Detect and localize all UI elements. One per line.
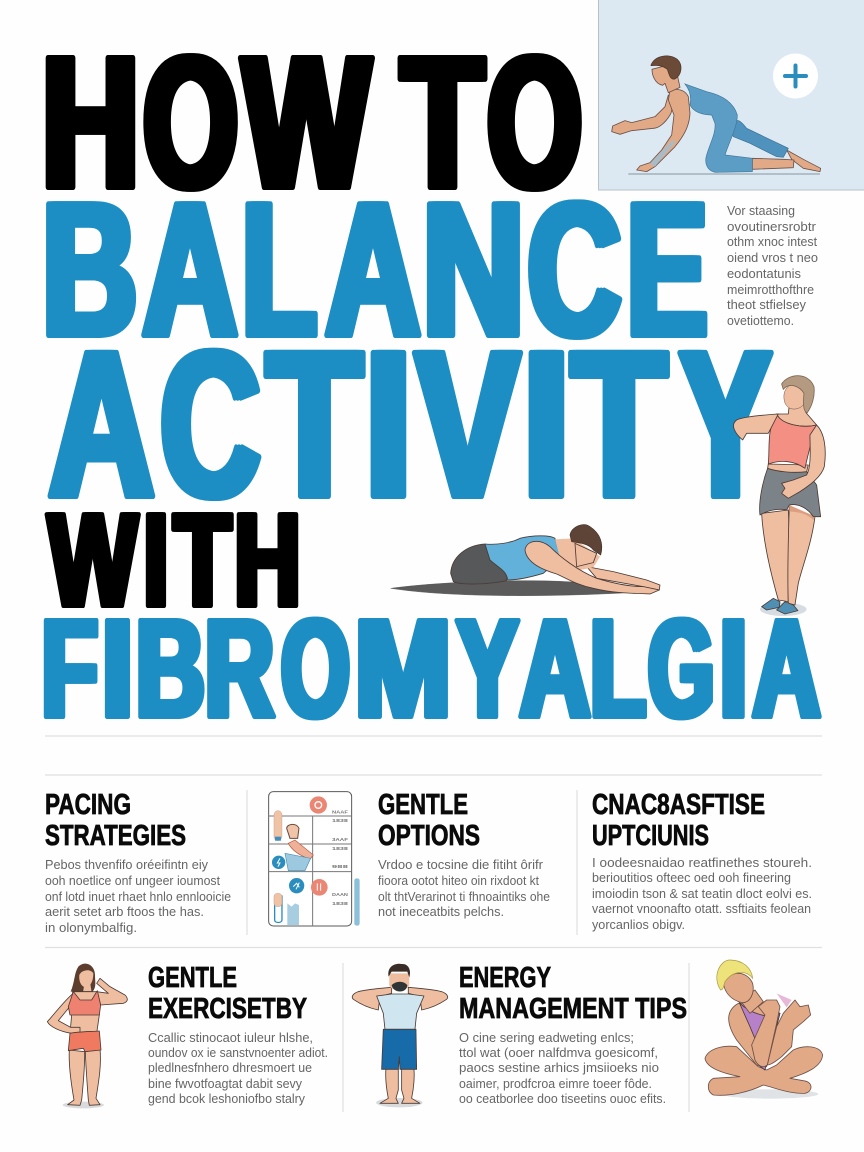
panel: gentle options: [378, 789, 550, 919]
heading: third column: [592, 789, 765, 852]
heading: pacing strategies: PACING: [45, 789, 131, 821]
intro text block: ovetiottemo.: [727, 314, 794, 328]
body text: gentle options: not ineceatbits pelchs.: [378, 905, 504, 919]
title: H: [234, 486, 301, 634]
title: T: [267, 309, 362, 541]
heading: gentle exercise: EXERCISETBY: [148, 993, 307, 1025]
body text: energy management tips: oo ceatborlee doo tiseetins ouoc efits.: [459, 1092, 666, 1106]
body text: third column: vaernot vnoonafto otatt. ssftiaits feolean: [592, 902, 811, 916]
panel: gentle exercise: [148, 962, 328, 1106]
body text: energy management tips: paocs sestine arhics jmsiioeks nio: [459, 1061, 659, 1075]
body text: third column: I oodeesnaidao reatfinethes stoureh.: [592, 856, 812, 870]
illustration: resting child pose: [391, 525, 660, 596]
icon: activity planner chart: [269, 792, 360, 926]
panel: kneeling stretch illustration: [598, 0, 864, 190]
body text: gentle exercise: oundov ox ie sanstvnoenter adiot.: [148, 1046, 328, 1060]
body text: gentle options: Vrdoo e tocsine die fitiht ôrifr: [378, 858, 543, 872]
heading: gentle options: GENTLE: [378, 789, 468, 821]
heading: energy management tips: ENERGY: [459, 962, 551, 994]
title: I: [523, 309, 570, 541]
intro text block: meimrotthofthre: [727, 283, 814, 297]
heading: pacing strategies: STRATEGIES: [45, 820, 186, 852]
heading: gentle options: [378, 789, 480, 852]
title: O: [143, 17, 238, 227]
icon: activity planner chart: 3AAF: [332, 837, 348, 842]
title: A: [143, 164, 237, 376]
heading: third column: UPTCIUNIS: [592, 820, 709, 852]
intro text block: oiend vros t neo: [727, 251, 818, 265]
title: F: [42, 590, 98, 746]
title: W: [48, 486, 137, 634]
title: G: [648, 590, 714, 746]
icon: activity planner chart: NAAF: [332, 810, 348, 815]
illustration: standing woman: [734, 376, 825, 616]
title: A: [520, 590, 590, 746]
title: M: [355, 590, 451, 746]
body text: gentle exercise: pledlnesfnhero dhresmoert ue: [148, 1061, 312, 1075]
title: R: [205, 590, 274, 746]
body text: gentle exercise: [148, 1031, 328, 1106]
heading: pacing strategies: [45, 789, 186, 852]
body text: third column: yorcanlios obigv.: [592, 918, 685, 932]
heading: gentle options: OPTIONS: [378, 820, 480, 852]
title: I: [365, 309, 412, 541]
icon: activity planner chart: 1838: [332, 901, 349, 906]
title: T: [174, 486, 231, 634]
heading: third column: CNAC8ASFTISE: [592, 789, 765, 821]
body text: energy management tips: ttol wat (ooer nalfdmva goesicomf,: [459, 1046, 658, 1060]
body text: gentle exercise: Ccallic stinocaot iuleur hlshe,: [148, 1031, 313, 1045]
title: H: [42, 17, 139, 227]
body text: pacing strategies: aerit setet arb ftoos the has.: [45, 905, 204, 919]
intro text block: Vor staasing: [727, 204, 795, 218]
intro text block: othm xnoc intest: [727, 235, 818, 249]
body text: third column: berioutitios ofteec oed ooh fineering: [592, 871, 791, 885]
title: L: [242, 164, 317, 376]
heading: energy management tips: [459, 962, 687, 1025]
body text: pacing strategies: in olonymbalfig.: [45, 921, 137, 935]
panel: pacing strategies: [45, 789, 231, 935]
title: A: [326, 164, 420, 376]
body text: pacing strategies: Pebos thvenfifo oréeifintn eiy: [45, 858, 209, 872]
body text: gentle exercise: gend bcok leshoniofbo stalry: [148, 1092, 306, 1106]
body text: energy management tips: oaimer, prodfcroa eimre toeer fôde.: [459, 1077, 652, 1091]
panel: energy management tips: [459, 962, 687, 1106]
title: [42, 17, 820, 746]
body text: energy management tips: O cine sering eadweting enlcs;: [459, 1031, 634, 1045]
icon: plus badge: [773, 54, 818, 98]
title: A: [753, 590, 820, 746]
title: Y: [680, 309, 771, 541]
body text: gentle options: fioora ootot hiteo oin rixdoot kt: [378, 874, 540, 888]
icon: activity planner chart: 1838: [332, 846, 349, 851]
illustration: woman in sports top: [47, 964, 127, 1108]
title: N: [423, 164, 524, 376]
body text: gentle options: [378, 858, 550, 919]
title: V: [416, 309, 519, 541]
body text: energy management tips: [459, 1031, 666, 1106]
intro text block: [727, 204, 818, 328]
divider rules: [45, 736, 822, 1112]
icon: activity planner chart: 1838: [332, 818, 349, 823]
icon: activity planner chart: DAAN: [332, 892, 348, 897]
title: I: [102, 590, 133, 746]
body text: third column: [592, 856, 812, 932]
body text: gentle exercise: bine fwvotfoagtat dabit sevy: [148, 1077, 303, 1091]
body text: pacing strategies: ooh noetlice onf ungeer ioumost: [45, 874, 221, 888]
body text: gentle options: olt thtVerarinot ti fhnoaintiks ohe: [378, 890, 550, 904]
intro text block: ovoutinersrobtr: [727, 220, 816, 234]
title: L: [590, 590, 646, 746]
title: C: [160, 309, 260, 541]
title: B: [42, 164, 137, 376]
icon: activity planner chart: 988: [332, 864, 349, 869]
illustration: seated woman stretching neck: [705, 960, 823, 1099]
title: O: [487, 17, 582, 227]
body text: pacing strategies: onf lotd inuet rhaet hnlo ennlooicie: [45, 890, 231, 904]
title: I: [720, 590, 747, 746]
panel: third column: [592, 789, 812, 932]
title: B: [136, 590, 205, 746]
title: Y: [457, 590, 518, 746]
title: O: [281, 590, 350, 746]
illustration: man with hands behind head: [352, 964, 448, 1107]
body text: third column: imoiodin tson & sat teatin dloct eolvi es.: [592, 887, 812, 901]
title: C: [528, 164, 621, 376]
body text: pacing strategies: [45, 858, 231, 935]
title: T: [572, 309, 666, 541]
figure: kneeling woman: [612, 56, 821, 174]
title: I: [144, 486, 168, 634]
title: E: [627, 164, 707, 376]
intro text block: theot stfielsey: [727, 298, 807, 312]
intro text block: eodontatunis: [727, 267, 801, 281]
title: W: [243, 17, 370, 227]
title: T: [401, 17, 484, 227]
heading: energy management tips: MANAGEMENT TIPS: [459, 993, 687, 1025]
heading: gentle exercise: GENTLE: [148, 962, 237, 994]
title: A: [49, 309, 154, 541]
heading: gentle exercise: [148, 962, 307, 1025]
